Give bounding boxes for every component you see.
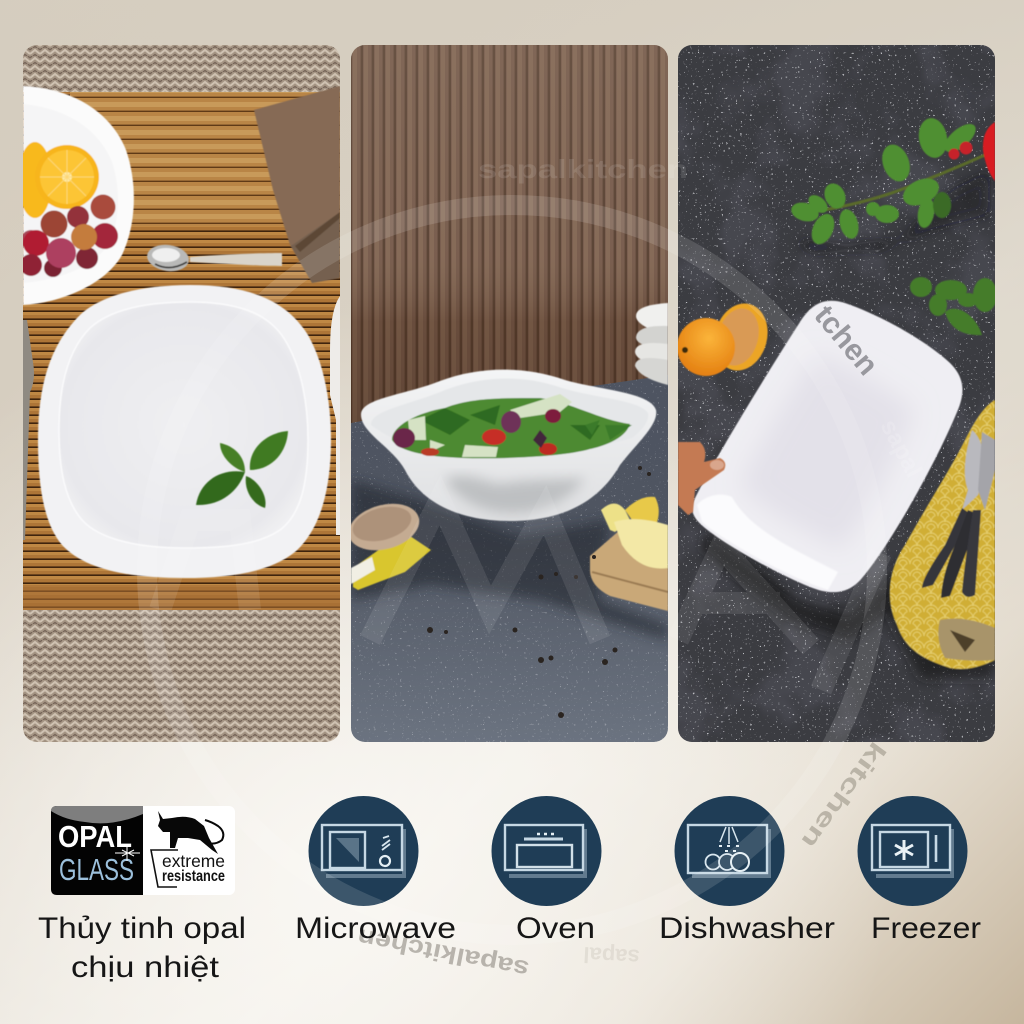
badge: opal glass extreme resistance (51, 806, 235, 895)
orange (678, 302, 768, 377)
bull icon (158, 811, 223, 854)
rectangular plate (692, 301, 962, 592)
sprig of leaves (789, 116, 995, 252)
watermark: sapalkitchen text: kitchen (796, 736, 891, 853)
panel: salad bowl on grey table (344, 45, 668, 742)
watermark: sapalkitchen text (355, 154, 927, 983)
label: microwave: Microwave (295, 912, 456, 945)
cutting board with lemons (590, 497, 668, 611)
icon: microwave (308, 796, 418, 906)
peppercorn scatter (427, 466, 651, 718)
knife right (330, 296, 340, 535)
yellow napkin with cutlery (880, 400, 995, 680)
orange slices (18, 142, 99, 218)
icon: dishwasher (674, 796, 784, 906)
labels (38, 912, 981, 984)
dark slate background (678, 45, 995, 742)
fork left (23, 320, 34, 540)
cup outline (151, 850, 178, 887)
salad bowl (361, 370, 656, 521)
sparkle (115, 846, 140, 861)
watermark: sapalkitchen text: sapalkitchen (478, 154, 688, 184)
label: freezer: Freezer (871, 912, 981, 945)
icon: oven (492, 796, 602, 906)
plate shadow (700, 530, 905, 640)
woven placemat bottom (23, 610, 340, 742)
spoon (146, 244, 283, 272)
watermark: sapalkitchen text: sapal (583, 942, 640, 970)
watermark: sapalkitchen text: sapal (875, 415, 927, 482)
basil leaves (196, 431, 288, 508)
resistance text: resistance (162, 868, 225, 885)
extreme text: extreme (162, 851, 225, 871)
large square plates (38, 285, 331, 578)
ribbed wood wall (351, 45, 668, 430)
OPAL wordmark: OPAL (58, 819, 132, 854)
label: opal glass: Thủy tinh opal (38, 912, 246, 945)
watermark: sapalkitchen text: tchen (808, 299, 884, 382)
icon: freezer (858, 796, 968, 906)
stacked plates (635, 303, 668, 385)
label: heat resistant: chịu nhiệt (71, 951, 220, 984)
woven placemat top (23, 45, 340, 93)
label: oven: Oven (516, 912, 595, 945)
panel: square plates on bamboo mat (18, 45, 340, 742)
GLASS wordmark: GLASS (59, 852, 134, 887)
label: dishwasher: Dishwasher (659, 912, 835, 945)
hand holding plate (678, 442, 725, 515)
wooden spoon and yellow napkin (351, 503, 432, 590)
grapes (20, 194, 118, 277)
bamboo mat (23, 92, 340, 610)
watermark: circular logo ring and letters (147, 205, 881, 935)
watermark: sapalkitchen text: sapalkitchen (355, 923, 531, 983)
brown napkin (254, 86, 340, 283)
salad (392, 394, 632, 458)
panel: rectangular plate on dark slate (677, 45, 997, 742)
basil sprig (910, 277, 997, 335)
top plate with fruit (18, 86, 134, 305)
grey stone table (351, 375, 668, 742)
